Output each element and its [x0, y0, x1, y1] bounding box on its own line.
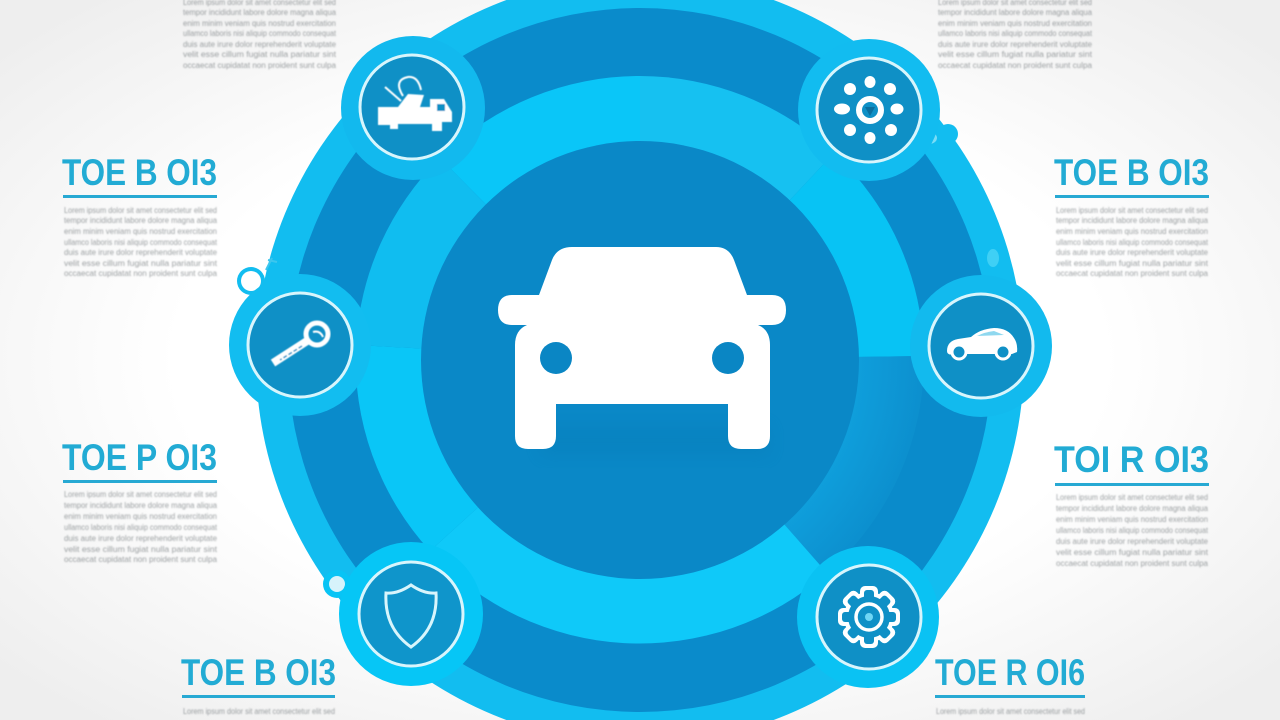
text block: top left: occaecat cupidatat non proident sunt culpa	[183, 61, 337, 70]
text block: lower left: Lorem ipsum dolor sit amet consectetur elit sed	[64, 490, 217, 499]
text block: top left: ullamco laboris nisi aliquip commodo consequat	[183, 29, 337, 38]
badge: flower dots	[798, 39, 940, 181]
ring segment: bottom	[430, 360, 827, 643]
text block: top left: tempor incididunt labore dolore magna aliqua	[183, 8, 337, 17]
text block: lower right: duis aute irure dolor reprehenderit voluptate	[1056, 537, 1209, 546]
text block: upper right: duis aute irure dolor reprehenderit voluptate	[1056, 248, 1209, 257]
text block: upper left: velit esse cillum fugiat nulla pariatur sint	[64, 259, 218, 268]
icon: side car	[947, 328, 1017, 359]
text block: top right: enim minim veniam quis nostrud exercitation	[938, 19, 1092, 28]
text block: top left: velit esse cillum fugiat nulla pariatur sint	[183, 50, 337, 59]
text block: top right	[938, 0, 1093, 70]
text block: lower right: Lorem ipsum dolor sit amet consectetur elit sed	[1056, 493, 1208, 502]
ring segment: right	[640, 153, 924, 360]
text block: top left	[183, 0, 337, 70]
text block: bottom right: Lorem ipsum dolor sit amet consectetur elit sed	[936, 707, 1085, 716]
text block: upper left: duis aute irure dolor reprehenderit voluptate	[64, 248, 218, 257]
ring segment: top left	[440, 76, 640, 360]
text block: lower right	[1054, 439, 1209, 568]
icon: key	[273, 323, 328, 363]
central ring diagram	[256, 0, 1024, 720]
text block: upper left: Lorem ipsum dolor sit amet consectetur elit sed	[64, 206, 217, 215]
ring segment: upper left	[356, 158, 640, 360]
text block: upper left: occaecat cupidatat non proident sunt culpa	[64, 269, 218, 278]
text block: upper right	[1054, 152, 1209, 278]
text block: top right: duis aute irure dolor reprehenderit voluptate	[938, 40, 1093, 49]
icon: central car	[498, 247, 786, 456]
text block: upper right: velit esse cillum fugiat nulla pariatur sint	[1056, 259, 1209, 268]
text block: lower left: TOE P OI3	[62, 437, 217, 478]
icon: gear	[838, 586, 900, 648]
text block: bottom left	[181, 652, 336, 716]
badge: truck	[341, 36, 485, 180]
text block: bottom right: TOE R OI6	[935, 652, 1085, 693]
text block: lower right: occaecat cupidatat non proident sunt culpa	[1056, 559, 1209, 568]
text block: lower left: ullamco laboris nisi aliquip commodo consequat	[64, 523, 218, 532]
text block: upper left	[62, 152, 218, 278]
text block: bottom left: TOE B OI3	[181, 652, 336, 693]
icon: shield	[386, 585, 436, 647]
text block: upper right: Lorem ipsum dolor sit amet consectetur elit sed	[1056, 206, 1208, 215]
text block: top left: duis aute irure dolor reprehenderit voluptate	[183, 40, 337, 49]
text block: bottom left: Lorem ipsum dolor sit amet consectetur elit sed	[183, 707, 335, 716]
text block: upper left: tempor incididunt labore dolore magna aliqua	[64, 216, 218, 225]
text block: top right: ullamco laboris nisi aliquip commodo consequat	[938, 29, 1093, 38]
text block: upper right: TOE B OI3	[1054, 152, 1209, 193]
badge: shield	[339, 542, 483, 686]
badge: gear	[797, 546, 939, 688]
text block: top right: velit esse cillum fugiat nulla pariatur sint	[938, 50, 1093, 59]
text block: upper left: ullamco laboris nisi aliquip commodo consequat	[64, 238, 218, 247]
text block: lower right: TOI R OI3	[1054, 439, 1209, 480]
text block: lower right: tempor incididunt labore dolore magna aliqua	[1056, 504, 1209, 513]
text block: lower left: velit esse cillum fugiat nulla pariatur sint	[64, 545, 218, 554]
text block: lower left	[62, 437, 218, 564]
icon: dots around center	[834, 76, 904, 144]
badge: car	[910, 275, 1052, 417]
text block: bottom right	[935, 652, 1085, 716]
text block: upper left: TOE B OI3	[62, 152, 217, 193]
ring segment: top right	[640, 76, 834, 360]
text block: top left: enim minim veniam quis nostrud exercitation	[183, 19, 336, 28]
text block: upper right: tempor incididunt labore dolore magna aliqua	[1056, 216, 1209, 225]
icon: truck	[378, 77, 452, 131]
badge: key	[229, 274, 371, 416]
ring segment: lower right	[640, 356, 924, 573]
ring segment: lower left	[356, 345, 640, 551]
dark band	[288, 8, 992, 712]
text block: top right: occaecat cupidatat non proident sunt culpa	[938, 61, 1093, 70]
text block: upper right: enim minim veniam quis nostrud exercitation	[1056, 227, 1208, 236]
text block: lower left: duis aute irure dolor reprehenderit voluptate	[64, 534, 218, 543]
text block: upper right: occaecat cupidatat non proident sunt culpa	[1056, 269, 1209, 278]
text block: lower right: enim minim veniam quis nostrud exercitation	[1056, 515, 1208, 524]
text block: lower left: occaecat cupidatat non proident sunt culpa	[64, 555, 218, 564]
text block: lower right: velit esse cillum fugiat nulla pariatur sint	[1056, 548, 1209, 557]
text block: lower left: enim minim veniam quis nostrud exercitation	[64, 512, 217, 521]
decorative bubbles	[237, 124, 999, 598]
text block: lower right: ullamco laboris nisi aliquip commodo consequat	[1056, 526, 1209, 535]
text block: upper right: ullamco laboris nisi aliquip commodo consequat	[1056, 238, 1209, 247]
text block: top right: tempor incididunt labore dolore magna aliqua	[938, 8, 1093, 17]
text block: upper left: enim minim veniam quis nostrud exercitation	[64, 227, 217, 236]
outer ring	[256, 0, 1024, 720]
center disc	[421, 141, 859, 579]
text block: lower left: tempor incididunt labore dolore magna aliqua	[64, 501, 218, 510]
